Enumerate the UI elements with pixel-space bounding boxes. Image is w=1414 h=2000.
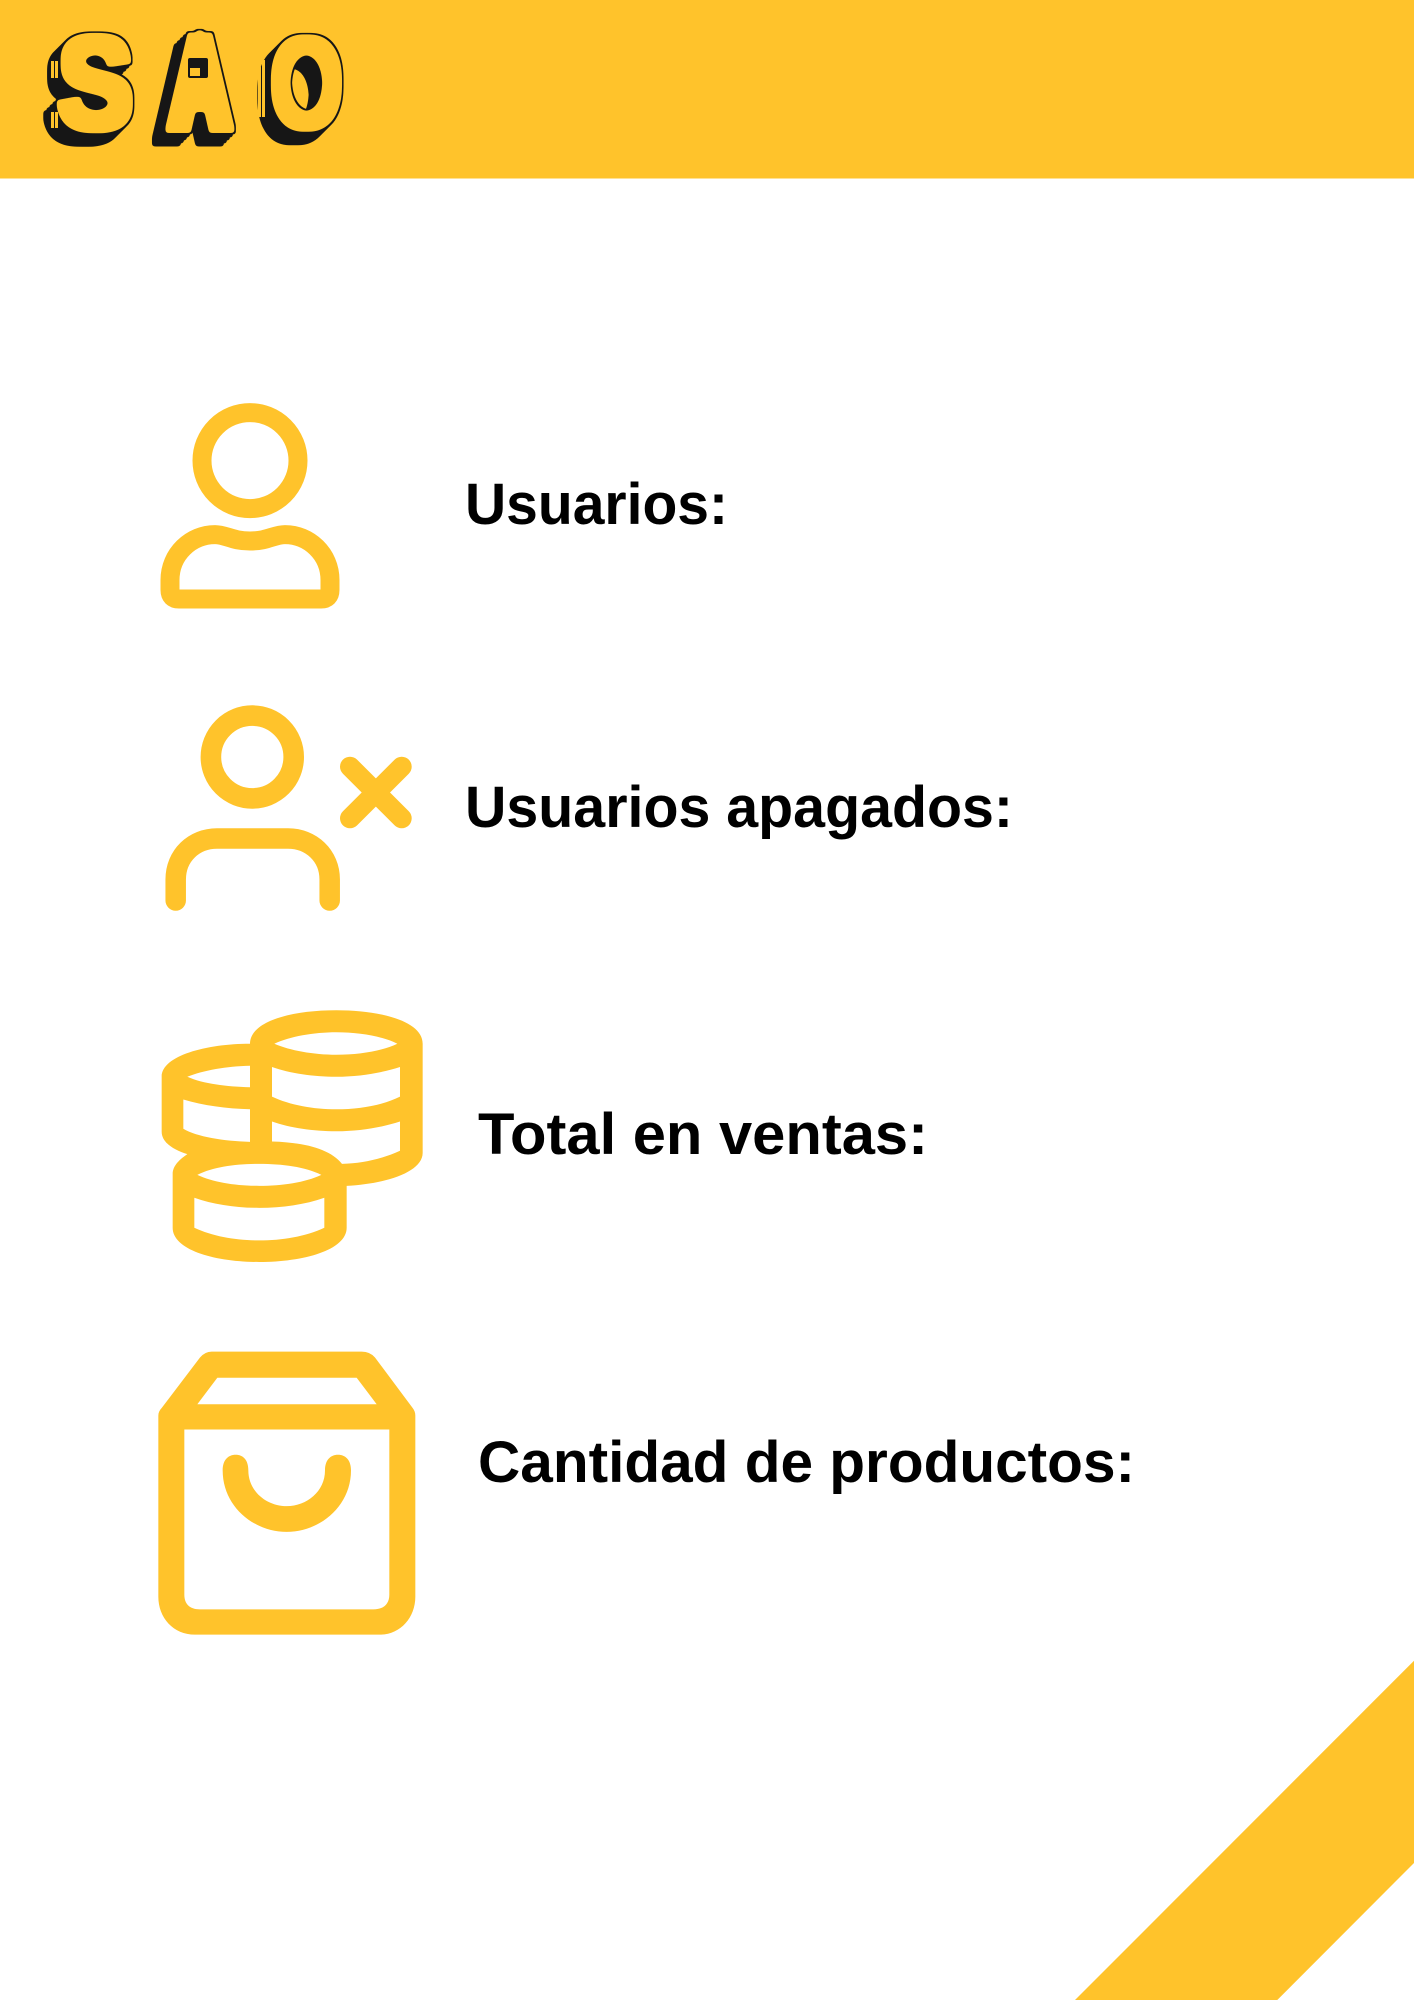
icon: user with x bbox=[176, 716, 402, 900]
panel: usuarios bbox=[170, 413, 728, 599]
header band bbox=[0, 0, 1414, 178]
corner diagonal stripe bbox=[1075, 1661, 1414, 2000]
panel: usuarios apagados bbox=[176, 716, 1013, 900]
label: usuarios: Usuarios: bbox=[465, 472, 728, 537]
logo: SAO bbox=[51, 12, 343, 156]
label: usuarios apagados: Usuarios apagados: bbox=[465, 775, 1013, 840]
label: cantidad de productos: Cantidad de productos: bbox=[478, 1430, 1135, 1495]
panel: cantidad de productos bbox=[158, 1352, 1135, 1635]
logo: SAO: A bbox=[172, 16, 228, 150]
icon: shopping bag bbox=[158, 1352, 415, 1635]
logo: SAO: O bbox=[270, 12, 343, 156]
icon: user bbox=[170, 413, 330, 599]
panel: total en ventas bbox=[162, 1010, 928, 1262]
icon: coins bbox=[162, 1010, 423, 1262]
label: total en ventas: Total en ventas: bbox=[478, 1102, 928, 1167]
logo: SAO: S bbox=[58, 12, 133, 156]
